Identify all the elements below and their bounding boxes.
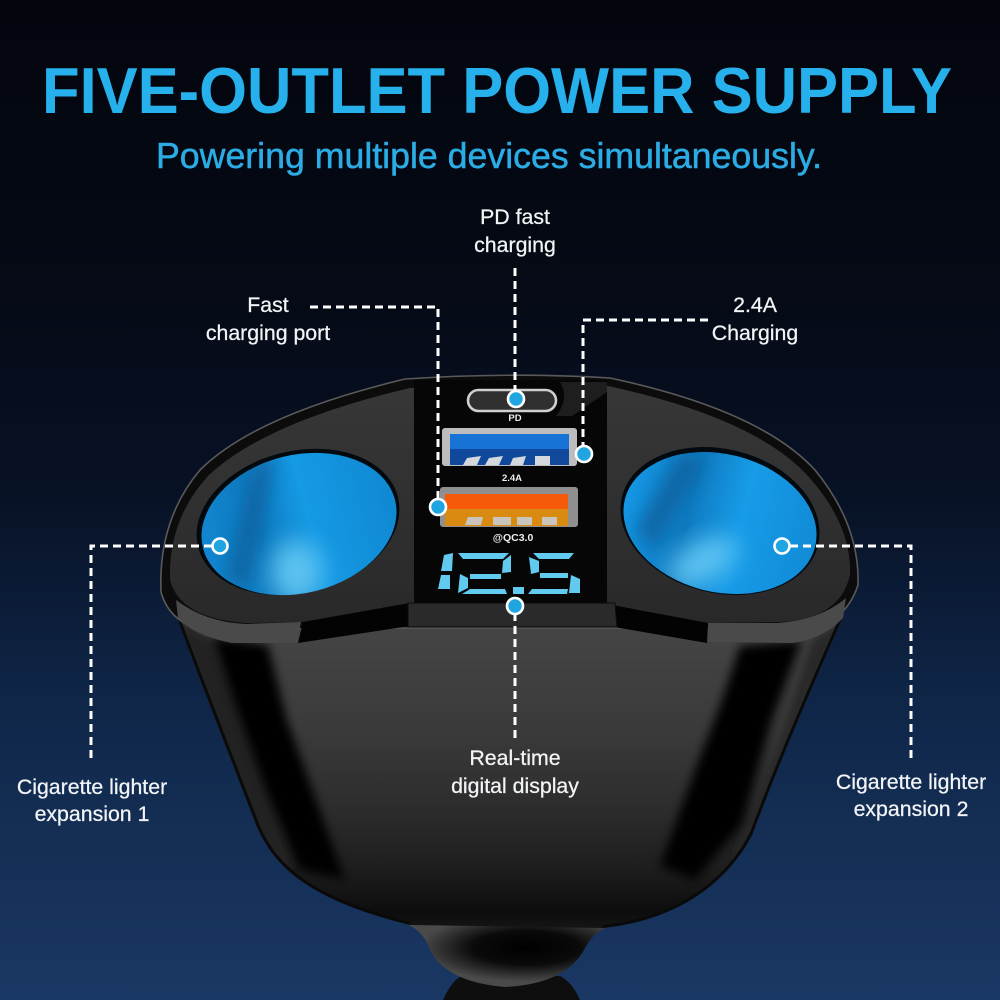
leader: cigarette lighter 2 — [790, 546, 911, 762]
socket dark sheen — [225, 460, 275, 590]
label: 2.4A charging: 2.4A — [733, 293, 778, 317]
label: cigarette lighter expansion 2: Cigarette lighter — [836, 770, 986, 794]
leader: cigarette lighter 1 — [91, 546, 212, 762]
right black band — [660, 640, 802, 880]
digital display 12.5 — [438, 553, 580, 594]
centre lower bar — [408, 603, 617, 627]
label: real-time digital display: digital display — [451, 774, 579, 798]
leader: 2.4A charging — [583, 320, 708, 447]
label: PD fast charging: charging — [474, 233, 556, 257]
top plate face — [170, 386, 850, 623]
right outer edge — [603, 617, 843, 928]
right outer sheen — [760, 625, 836, 798]
car charger product — [161, 375, 858, 1000]
leader: fast charging port — [310, 307, 438, 500]
socket glow — [270, 540, 322, 604]
leader: real-time display — [514, 613, 516, 740]
dark notch right — [612, 605, 708, 643]
callout dot: cigarette lighter 1 — [212, 538, 228, 554]
contacts — [465, 517, 557, 525]
socket glow — [659, 526, 745, 598]
top plate rim — [161, 375, 858, 632]
lower body — [177, 590, 843, 928]
neck and plug stem — [398, 919, 612, 1000]
USB-C PD port: PD — [508, 413, 522, 424]
blue USB port 2.4A: 2.4A — [502, 473, 522, 484]
contacts — [463, 456, 550, 465]
label: 2.4A charging: Charging — [712, 321, 798, 345]
label: fast charging port: Fast — [247, 293, 289, 317]
left outer sheen — [182, 622, 273, 822]
right socket — [620, 447, 820, 595]
leader: PD — [514, 268, 516, 392]
label: cigarette lighter expansion 1: expansion 1 — [35, 802, 149, 826]
callout dot: fast charging port — [430, 499, 446, 515]
panel glare — [556, 382, 607, 416]
callout dot: 2.4A charging — [576, 446, 592, 462]
left socket — [196, 448, 400, 596]
orange USB port QC3.0: @QC3.0 — [493, 532, 533, 544]
body reflections — [172, 615, 848, 928]
USB-C PD port — [468, 390, 556, 424]
callout dot: real-time display — [507, 598, 523, 614]
callout dot: PD — [508, 391, 524, 407]
blue USB port 2.4A — [442, 428, 577, 484]
label: cigarette lighter expansion 1: Cigarette lighter — [17, 775, 167, 799]
orange USB port QC3.0 — [440, 487, 578, 544]
title: FIVE-OUTLET POWER SUPPLY — [42, 54, 952, 127]
dark notch left — [298, 603, 410, 643]
label: PD fast charging: PD fast — [480, 205, 550, 229]
label: real-time digital display: Real-time — [469, 746, 561, 770]
subtitle: Powering multiple devices simultaneously. — [156, 135, 822, 176]
socket dark sheen — [635, 452, 705, 550]
callout dot: cigarette lighter 2 — [774, 538, 790, 554]
bottom lip right — [707, 598, 846, 643]
centre black panel — [414, 380, 607, 604]
label: cigarette lighter expansion 2: expansion 2 — [854, 797, 968, 821]
label: fast charging port: charging port — [206, 321, 330, 345]
bottom lip left — [176, 600, 301, 643]
left black band — [212, 636, 345, 880]
left outer edge — [177, 618, 410, 925]
